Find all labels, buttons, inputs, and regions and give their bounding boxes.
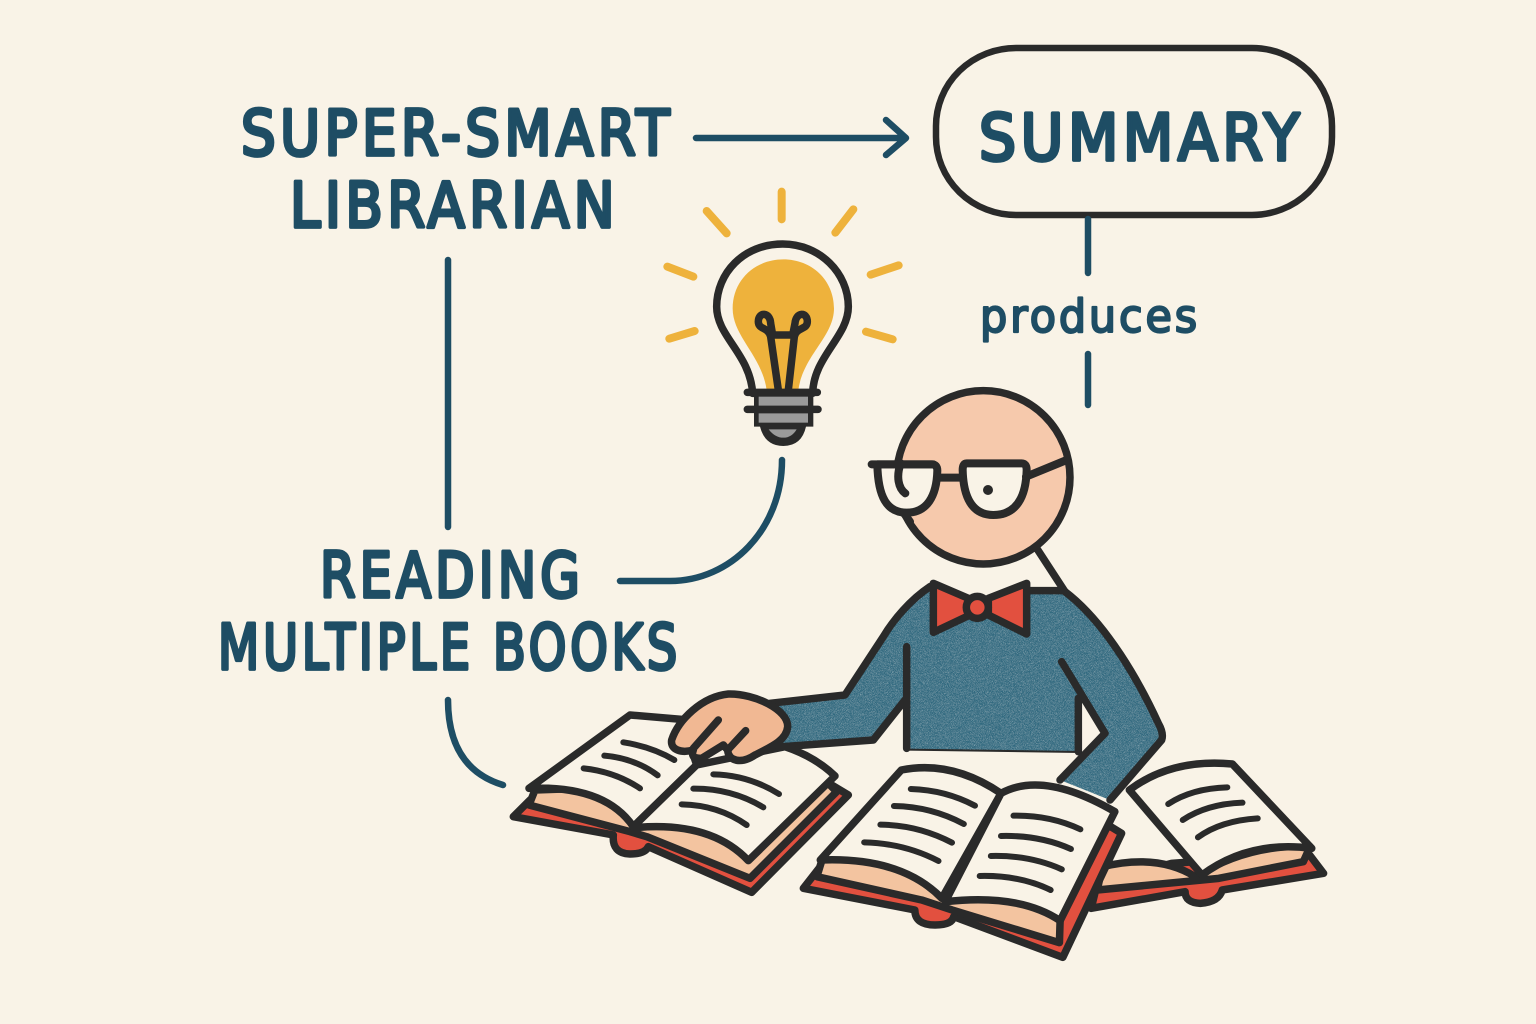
label: reading multiple books: MULTIPLE BOOKS	[218, 611, 681, 684]
glasses right lens	[963, 463, 1027, 515]
bulb glow	[733, 259, 834, 390]
label: reading multiple books	[218, 539, 681, 684]
connector: reading to books	[448, 700, 503, 785]
connector: summary to produces	[1085, 219, 1091, 273]
bulb rays	[667, 192, 899, 339]
cover	[803, 827, 1122, 957]
icon: light bulb	[667, 192, 899, 446]
bulb glass	[717, 244, 848, 393]
text lines	[1168, 787, 1258, 837]
arrow: librarian to summary	[696, 120, 906, 155]
label: super-smart librarian: LIBRARIAN	[290, 169, 619, 242]
filament	[758, 314, 807, 390]
sweater hem	[907, 750, 1080, 752]
head outline through lens and temple	[872, 463, 933, 522]
page block	[817, 817, 1060, 943]
left page	[820, 768, 1001, 898]
eye	[983, 485, 993, 495]
cover	[1091, 853, 1324, 908]
page block	[1097, 846, 1310, 890]
bow tie	[933, 583, 1027, 634]
book 3: right	[1091, 763, 1324, 908]
hand	[672, 694, 788, 760]
head	[897, 391, 1070, 564]
right text lines	[682, 774, 779, 825]
summary box	[936, 48, 1332, 215]
book 2: centre	[803, 768, 1122, 957]
page	[1129, 763, 1312, 875]
connector: produces to librarian	[1085, 354, 1091, 405]
left page	[529, 715, 697, 827]
right page	[945, 785, 1115, 921]
connector: reading to lightbulb	[620, 460, 782, 581]
label: super-smart librarian	[241, 97, 674, 242]
cover	[513, 785, 848, 892]
page block	[529, 780, 837, 878]
right text lines	[980, 816, 1080, 890]
connector: librarian to reading	[445, 260, 451, 527]
sweater	[770, 587, 1162, 800]
bulb screw base	[747, 392, 818, 446]
summary box: SUMMARY	[979, 102, 1304, 176]
head and glasses	[872, 391, 1070, 564]
label: super-smart librarian: SUPER-SMART	[241, 97, 674, 170]
left text lines	[584, 742, 674, 788]
neck line	[1036, 547, 1065, 592]
glasses left lens	[877, 464, 937, 513]
left text lines	[864, 789, 975, 861]
person: librarian	[770, 547, 1162, 800]
glasses bridge and arm	[937, 460, 1067, 478]
right page	[633, 747, 835, 861]
book 1: left	[513, 694, 848, 892]
sweater outline	[770, 587, 1162, 800]
label: reading multiple books: READING	[320, 539, 584, 612]
label: produces: produces	[980, 290, 1200, 343]
